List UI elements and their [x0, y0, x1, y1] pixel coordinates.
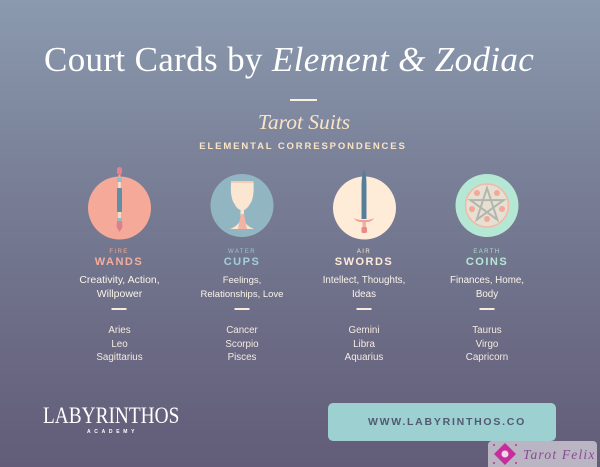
signs: coins: Capricorn [466, 352, 508, 363]
keywords: cups: Relationships, Love [201, 288, 283, 300]
website button [328, 403, 556, 441]
signs: coins: Taurus [472, 325, 502, 336]
divider [356, 308, 372, 310]
signs: coins [466, 325, 508, 363]
keywords: swords: Ideas [352, 288, 376, 300]
column: wands [79, 248, 160, 363]
signs: swords: Libra [353, 338, 375, 350]
keywords: coins: Body [476, 288, 498, 300]
keywords: cups [201, 275, 283, 300]
title divider [290, 99, 317, 101]
column: swords [323, 248, 405, 363]
signs: cups: Pisces [228, 352, 256, 363]
signs: wands: Leo [111, 338, 128, 350]
suit name: coins: COINS [466, 256, 508, 268]
keywords: coins: Finances, Home, [450, 275, 524, 286]
divider [480, 308, 494, 310]
keywords: coins [450, 275, 524, 300]
divider [112, 308, 126, 310]
suit name: wands: WANDS [95, 256, 143, 268]
subtitle: Tarot Suits [258, 110, 350, 134]
logo: Labyrinthos Academy [43, 403, 179, 435]
signs: cups: Cancer [226, 325, 258, 336]
logo tagline: ACADEMY [87, 429, 138, 435]
signs: swords: Gemini [348, 325, 380, 336]
subheading: ELEMENTAL CORRESPONDENCES [199, 141, 407, 152]
icon: wands [88, 167, 151, 240]
column: cups [201, 248, 283, 363]
signs: wands: Aries [108, 325, 131, 336]
website button: WWW.LABYRINTHOS.CO [368, 416, 526, 428]
element label: air: AIR [357, 249, 371, 255]
element label: water: WATER [228, 249, 256, 255]
signs: wands [96, 325, 143, 363]
watermark: Tarot Felix [488, 441, 597, 467]
suit name: cups: CUPS [224, 256, 260, 268]
icon: cups [210, 174, 274, 237]
watermark icon [493, 443, 517, 465]
keywords: swords: Intellect, Thoughts, [323, 275, 405, 286]
element label: fire: FIRE [109, 249, 129, 255]
title: Court Cards by Element & Zodiac [44, 40, 534, 79]
icon: coins [456, 174, 518, 237]
signs: cups: Scorpio [225, 338, 259, 350]
watermark text: Tarot Felix [523, 447, 596, 462]
logo wordmark: LABYRINTHOS [43, 403, 179, 428]
element label: earth: EARTH [473, 249, 501, 255]
keywords: cups: Feelings, [223, 275, 261, 286]
suit name: swords: SWORDS [335, 256, 393, 268]
signs: coins: Virgo [476, 338, 498, 350]
signs: cups [225, 325, 259, 363]
signs: swords: Aquarius [345, 352, 383, 363]
column: coins [450, 248, 524, 363]
signs: swords [344, 325, 383, 363]
divider [234, 308, 250, 310]
signs: wands: Sagittarius [96, 352, 143, 363]
keywords: wands: Willpower [97, 288, 142, 300]
icon: swords [333, 169, 396, 240]
keywords: wands: Creativity, Action, [79, 274, 160, 286]
keywords: swords [323, 275, 405, 300]
keywords: wands [79, 274, 160, 300]
